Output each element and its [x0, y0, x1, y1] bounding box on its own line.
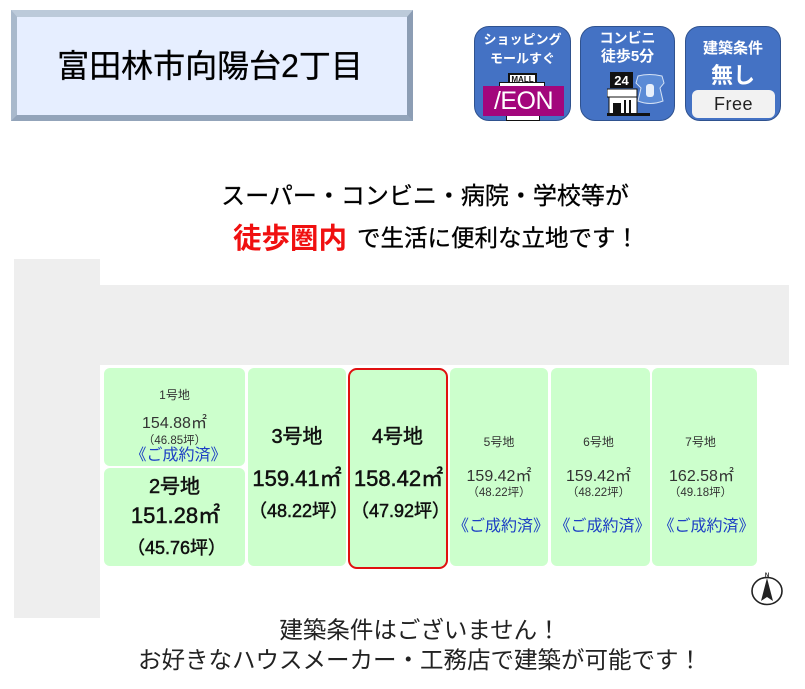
lot 5: 159.42㎡ — [467, 468, 531, 485]
lot 7: 162.58㎡ — [669, 468, 734, 485]
badge: convenience store: コンビニ — [600, 30, 656, 46]
label: Free: Free — [714, 94, 753, 114]
lot 5: （48.22坪） — [467, 487, 531, 499]
badge: convenience store — [580, 26, 675, 121]
lot 3 — [248, 368, 346, 566]
badge: no building conditions — [685, 26, 781, 121]
road: horizontal — [100, 285, 789, 365]
badge: no building conditions: 無し — [711, 63, 755, 88]
lot 6: 159.42㎡ — [566, 468, 631, 485]
badge: shopping mall: ショッピング — [483, 32, 562, 47]
icon: north compass: N — [765, 573, 769, 579]
status: sold: 《ご成約済》 — [658, 518, 754, 535]
icon: Lawson badge — [636, 74, 664, 104]
status: sold: 《ご成約済》 — [130, 447, 226, 464]
status: sold: 《ご成約済》 — [453, 518, 549, 535]
lot 2: 151.28㎡ — [131, 503, 220, 528]
icon: mall sign — [508, 73, 537, 85]
lot 1: 1号地 — [159, 388, 190, 402]
badge: shopping mall: モールすぐ — [490, 51, 555, 66]
icon: mall building — [499, 82, 545, 87]
icon: mall base — [506, 113, 540, 121]
lot 1: 154.88㎡ — [142, 415, 207, 432]
lot 2: （45.76坪） — [127, 538, 226, 558]
headline — [221, 183, 639, 255]
lot 4 highlighted — [348, 368, 448, 569]
footer line 2: お好きなハウスメーカー・工務店で建築が可能です！ — [138, 647, 702, 673]
icon: mall sign: MALL — [511, 75, 534, 84]
label: Free — [692, 90, 775, 118]
badge: convenience store: 徒歩5分 — [601, 48, 654, 65]
lot 5 — [450, 368, 548, 566]
headline line 2 remainder: で生活に便利な立地です！ — [357, 225, 639, 251]
road: vertical — [14, 259, 100, 618]
title text: 富田林市向陽台2丁目 — [57, 48, 363, 84]
map: roads — [14, 259, 789, 618]
lot 3: 159.41㎡ — [252, 466, 342, 491]
headline line 1: スーパー・コンビニ・病院・学校等が — [221, 183, 629, 210]
lot 4 highlighted: 158.42㎡ — [354, 466, 443, 491]
lot 3: （48.22坪） — [249, 501, 348, 521]
lot 2 — [104, 468, 245, 566]
lot 1: （46.85坪） — [143, 435, 206, 447]
lot 6 — [551, 368, 650, 566]
lot 6: 6号地 — [583, 435, 614, 449]
lot 1 — [104, 368, 245, 466]
lot 5: 5号地 — [484, 435, 514, 449]
status: sold: 《ご成約済》 — [554, 518, 650, 535]
icon: 24 hour store: 24 — [614, 73, 629, 88]
lot 7: （49.18坪） — [669, 487, 732, 499]
icon: 24 hour store — [607, 72, 650, 116]
title plate — [11, 10, 413, 121]
lot 3: 3号地 — [271, 426, 323, 448]
lot 6: （48.22坪） — [567, 487, 630, 499]
icon: north compass — [751, 572, 783, 606]
headline line 2: 徒歩圏内 — [233, 223, 347, 255]
lot 7 — [652, 368, 757, 566]
logo: AEON — [483, 86, 564, 116]
badge: no building conditions: 建築条件 — [703, 40, 763, 57]
badge: shopping mall — [474, 26, 571, 121]
footer line 1: 建築条件はございません！ — [279, 617, 561, 643]
lot 4 highlighted: （47.92坪） — [351, 501, 450, 521]
logo: AEON: /EON — [494, 87, 553, 115]
lot 2: 2号地 — [149, 476, 200, 498]
lot 7: 7号地 — [685, 435, 716, 449]
lot 4 highlighted: 4号地 — [372, 426, 423, 448]
footer text — [138, 617, 702, 673]
